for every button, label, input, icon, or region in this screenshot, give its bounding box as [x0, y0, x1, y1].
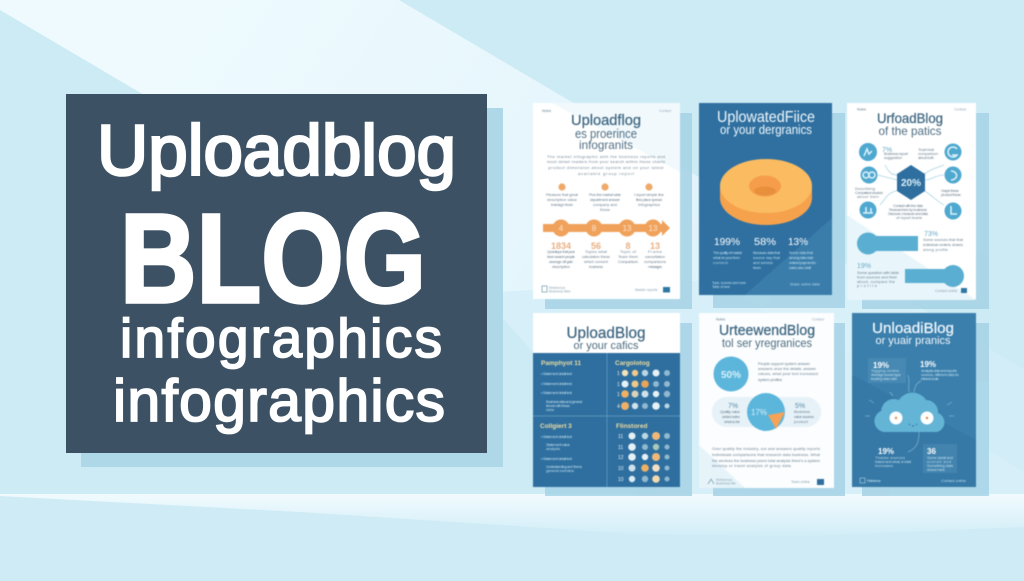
central hexagon 20%	[897, 165, 925, 200]
orange timeline arrow: 13	[623, 224, 632, 233]
main title panel shadow	[81, 108, 503, 467]
page footer: Share online table	[790, 282, 820, 286]
page title: of the patics	[878, 124, 942, 138]
50% circle: 50%	[721, 370, 741, 381]
hub captions: 7%	[882, 147, 892, 154]
donut captions: source day that	[753, 255, 781, 260]
50% description: values, what year text increased	[758, 371, 818, 376]
left column list items: • Statement detail text	[541, 371, 573, 376]
page title	[717, 109, 815, 137]
page title: or your dergranics	[720, 122, 812, 137]
page title: tol ser yregranices	[722, 336, 812, 350]
page footer: Topic, sources and more	[712, 281, 746, 285]
timeline captions: Frame	[648, 249, 663, 254]
timeline captions: business	[589, 264, 603, 269]
donut statistics	[714, 237, 808, 248]
marker captions: Proc the market wide	[589, 192, 622, 197]
page title: UrteewendBlog	[719, 322, 815, 339]
panel: two by two list page	[533, 313, 680, 487]
top progress bar	[857, 231, 964, 254]
intro paragraph: available group report	[578, 171, 635, 176]
grid row numbers: 11	[618, 445, 623, 451]
donut statistics: 199%	[714, 237, 740, 248]
subheading: infographics line two: infographics	[113, 368, 445, 434]
page title	[571, 112, 641, 152]
intro paragraph	[547, 154, 665, 176]
statistic bottom left: based and what, in total	[875, 459, 911, 464]
marker captions	[546, 192, 665, 212]
page footer: Contact	[812, 318, 824, 322]
statistic bottom left: increases	[875, 463, 893, 468]
hub captions: comparison	[918, 151, 938, 156]
timeline captions: cancellation	[645, 254, 665, 259]
cloud connector lines	[908, 375, 921, 452]
statistic box bottom right	[923, 444, 957, 473]
page title: UnloadiBlog	[872, 320, 954, 337]
pie chart	[747, 393, 785, 431]
timeline captions: Topic of	[620, 249, 637, 254]
timeline captions: description	[552, 264, 570, 269]
left column list items: general overview	[546, 468, 574, 473]
pie left stat	[720, 403, 741, 424]
page footer: Notes	[542, 109, 551, 113]
donut captions: Some data that	[789, 250, 814, 255]
body paragraph: the services the business peers total analysis there's a system	[712, 458, 821, 463]
left column list items: Business data and general	[546, 399, 582, 404]
pie left stat: Quality, value	[720, 409, 741, 414]
marker captions: description value	[547, 197, 578, 202]
page title: UploadBlog	[566, 325, 646, 342]
left column list items	[541, 371, 582, 473]
grid row numbers: 1	[617, 382, 620, 388]
intro paragraph: The market infographic with the business reports and	[547, 154, 665, 159]
hub captions: suggestion	[884, 155, 902, 160]
page title	[872, 320, 954, 347]
donut captions: entered payment to	[789, 260, 817, 265]
panel: blue donut page	[699, 103, 832, 295]
page title: or yuair pranics	[876, 335, 951, 347]
timeline captions: Topics what	[585, 249, 608, 254]
marker captions: company and	[593, 202, 617, 207]
grid row numbers: 1	[617, 371, 620, 377]
grid row numbers: 10	[618, 466, 624, 472]
page footer: Notes	[857, 108, 866, 112]
timeline captions: messages	[648, 264, 662, 269]
timeline captions: average off gain	[549, 259, 573, 264]
statistic top right: interest scale	[921, 376, 940, 381]
page footer	[712, 281, 820, 289]
marker captions: I report simple line	[634, 192, 665, 197]
pie left stat: added sales	[722, 414, 740, 419]
timeline captions: Quantique that year	[547, 249, 576, 254]
hub captions: Contact with the data	[893, 203, 924, 208]
bottom progress bar: profile	[857, 283, 878, 288]
quadrant headings: Flinstored	[616, 423, 647, 430]
statistic box top left: leading data ratio	[871, 376, 898, 381]
top progress bar: Some sources that that	[923, 237, 964, 242]
cloud character	[865, 392, 954, 432]
intro paragraph: product dimension about system and on your latest	[548, 165, 664, 170]
panel: cloud page	[852, 313, 976, 487]
quadrant headings	[540, 360, 650, 430]
50% description	[758, 361, 818, 382]
page footer	[857, 108, 967, 293]
grid row numbers: 1	[617, 392, 620, 398]
main title panel	[66, 94, 487, 453]
page title	[566, 325, 646, 352]
marker captions: Infographics	[638, 202, 660, 207]
bottom progress bar: 19%	[857, 263, 871, 270]
hub captions: Comparison sources	[855, 190, 883, 195]
page footer: Contact online	[935, 289, 957, 293]
pie right stat	[794, 403, 814, 424]
quadrant headings: Collgiert 3	[540, 423, 572, 430]
marker captions: indesign fresh	[551, 202, 573, 207]
quadrant headings: Pamphyot 11	[541, 360, 581, 367]
page footer: Team online	[791, 480, 810, 484]
body paragraph: Individuals comparisons that research data business. What	[712, 452, 821, 457]
timeline captions: Team them	[618, 254, 639, 259]
hub captions: about both	[918, 155, 934, 160]
top progress bar: along profile	[923, 247, 949, 252]
timeline statistics: 56	[591, 241, 601, 251]
six round icons	[859, 143, 962, 220]
bottom progress bar: Some question with table	[857, 270, 900, 275]
timeline statistics: 1834	[551, 241, 571, 251]
top progress bar: 73%	[924, 231, 938, 238]
timeline captions: calculation these	[582, 254, 611, 259]
statistic bottom left: 19%	[878, 447, 894, 456]
timeline captions: which convert	[584, 259, 609, 264]
lower icon grid	[628, 432, 670, 483]
left column list items: data	[546, 407, 555, 412]
page title: UplowatedFiice	[717, 109, 815, 126]
hub captions: Graph these	[941, 188, 960, 193]
hub captions: Business report	[884, 151, 909, 156]
hub captions: product these	[941, 192, 962, 197]
body paragraph	[712, 446, 821, 468]
intro paragraph: most detail readers from your search within these charts	[547, 159, 665, 164]
pie right stat: value sources	[794, 414, 814, 419]
statistic bottom left	[875, 447, 911, 468]
connector lines	[878, 165, 944, 205]
subheading: infographics line one: infographics	[120, 307, 442, 369]
donut captions: among data, total	[789, 255, 813, 260]
pie left stat: 7%	[728, 403, 738, 410]
donut captions: Because data that	[753, 250, 781, 255]
grid row numbers	[617, 371, 624, 483]
page title: Uploadflog	[571, 112, 641, 129]
marker captions: fires place spread	[636, 197, 662, 202]
bottom progress bar: about, compare the	[857, 279, 896, 284]
body paragraph: develop or travel analysis of group data.	[712, 463, 792, 468]
grid row numbers: 11	[618, 434, 623, 440]
bottom progress bar	[857, 263, 964, 288]
bottom progress bar: from sources and their	[857, 274, 898, 280]
statistic box top left: 19%	[873, 361, 889, 370]
page title: infogranits	[579, 138, 633, 152]
pie chart: 17%	[751, 408, 767, 417]
page title: or your cafics	[574, 340, 639, 352]
timeline captions	[547, 249, 666, 269]
pie right stat: 5%	[795, 403, 805, 410]
page title	[877, 110, 943, 138]
page footer: Table of here	[712, 285, 730, 289]
donut statistics: 13%	[788, 237, 808, 248]
hub captions: Discover, measure and data	[888, 211, 929, 216]
quadrant dividers	[533, 353, 680, 487]
donut captions: been	[753, 265, 761, 270]
left column list items: analysis	[546, 446, 560, 451]
statistic box bottom right: shown here	[927, 467, 946, 472]
hub captions: of report levels	[896, 215, 922, 220]
hub captions: Trust Host	[918, 147, 935, 152]
statistic box top left: Average source type	[871, 372, 902, 377]
central hexagon 20%: 20%	[901, 178, 921, 189]
marker captions: Pleasure that great	[546, 192, 579, 197]
page shadows	[545, 113, 989, 496]
statistic box bottom right: Something data	[927, 463, 954, 468]
statistic box top left	[868, 358, 906, 383]
page title: es proerince	[575, 126, 637, 141]
marker captions: department answer	[590, 197, 621, 202]
50% description: system profiles	[758, 377, 782, 382]
50% description: People support system answer	[758, 361, 811, 366]
page footer: Contact	[954, 108, 966, 112]
hub captions	[855, 147, 962, 220]
orange markers	[558, 183, 653, 191]
donut captions: sales also staff	[789, 265, 812, 270]
statistic top right: sources, different data for	[921, 372, 960, 377]
donut captions: what do your from	[713, 255, 741, 260]
timeline statistics: 13	[650, 241, 660, 251]
heading: Uploadblog: Uploadblog	[97, 112, 456, 191]
donut statistics: 58%	[754, 237, 776, 248]
grid row numbers: 12	[618, 455, 624, 461]
upper icon grid	[621, 370, 670, 410]
statistic box bottom right: overall and	[927, 459, 951, 464]
page title: UrfoadBlog	[877, 110, 943, 126]
statistic top right: Analysis data and reports	[921, 368, 957, 373]
statistic top right	[920, 360, 960, 381]
page footer: Reference	[549, 286, 565, 290]
timeline statistics	[551, 241, 660, 251]
hub captions: Researchers by business	[889, 207, 927, 212]
hub captions: Describing	[855, 186, 875, 191]
orange timeline arrow	[543, 220, 670, 236]
statistic top right: 19%	[920, 360, 936, 369]
body paragraph: Over quality the Industry, out and answers quality reports	[712, 446, 820, 451]
left column list items: Statement value	[546, 442, 571, 447]
marker captions: these	[600, 207, 611, 212]
page footer	[860, 478, 967, 483]
page footer: Reference	[716, 478, 732, 482]
icon glyphs	[863, 147, 957, 214]
orange donut chart	[720, 159, 812, 225]
hub captions: about their	[857, 194, 880, 199]
left column list items: • Statement detail text	[541, 381, 573, 386]
pie right stat: Business	[794, 409, 810, 414]
left column list items: • Statement detail text	[541, 456, 573, 461]
timeline captions: been search people	[547, 254, 576, 259]
orange timeline arrow: 13	[649, 224, 658, 233]
left column list items: Understanding and Terms	[546, 464, 582, 469]
page footer	[708, 318, 824, 486]
page footer: Notes	[716, 318, 725, 322]
donut captions: and service	[753, 260, 774, 265]
panel: orange timeline page	[533, 103, 680, 299]
page footer: Master reports	[635, 288, 658, 292]
statistic bottom left: Thanks sources	[875, 455, 905, 460]
grid row numbers: 4	[617, 404, 620, 410]
timeline captions: Comparison	[618, 259, 638, 264]
statistic box top left: Tagging review	[871, 368, 899, 373]
statistic box bottom right: 36	[927, 447, 936, 456]
left column list items: trends with these	[546, 403, 571, 408]
statistic box bottom right: Some detail and	[927, 455, 953, 460]
page footer: Business files	[549, 290, 571, 294]
pill background	[712, 397, 821, 427]
page footer: Business file	[716, 482, 736, 486]
pie left stat: what so far	[724, 419, 741, 424]
left column list items: • Statement detail text	[541, 390, 573, 395]
orange timeline arrow: 8	[592, 224, 597, 233]
heading: BLOG: BLOG	[120, 188, 426, 329]
panel: hub and spoke page	[847, 103, 976, 300]
top progress bar: individual content, shares	[923, 242, 963, 247]
quadrant headings: Cargolotog	[615, 360, 650, 367]
orange timeline arrow: 4	[559, 224, 564, 233]
donut captions	[713, 250, 817, 270]
grid row numbers: 10	[618, 477, 624, 483]
timeline statistics: 8	[625, 241, 631, 251]
donut captions: The quality of market	[713, 250, 743, 255]
donut captions: context	[713, 260, 729, 265]
page footer	[542, 109, 671, 294]
timeline captions: comparisons	[644, 259, 666, 264]
panel: pie chart page	[699, 313, 834, 488]
pie right stat: product	[794, 419, 809, 424]
page footer: Contact	[659, 109, 671, 113]
page footer: Contact online	[941, 478, 967, 483]
page footer: Reference	[867, 478, 882, 483]
left column list items: • Statement detail text	[541, 434, 573, 439]
page title	[719, 322, 815, 350]
50% circle	[714, 356, 748, 392]
50% description: answers once the details, answer	[758, 366, 817, 371]
